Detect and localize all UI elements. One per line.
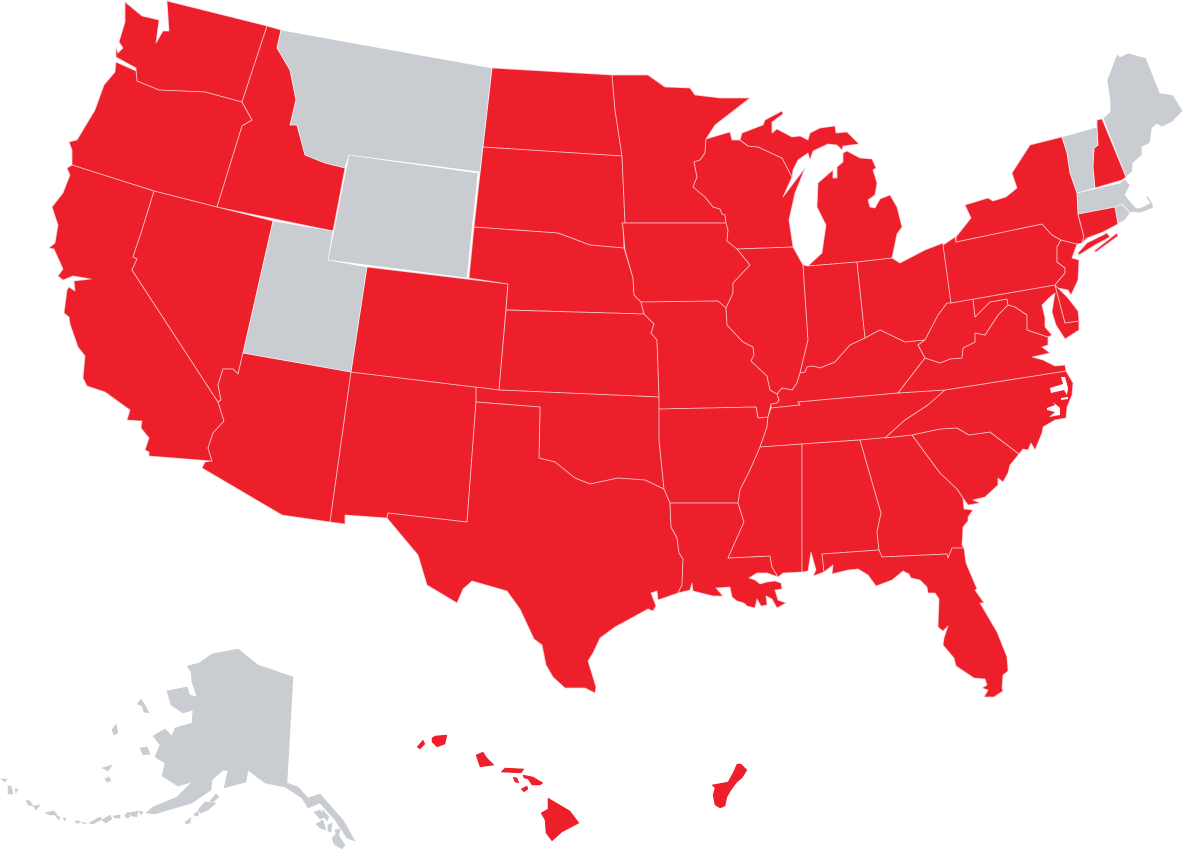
New Mexico [330, 372, 476, 524]
New Hampshire [1093, 119, 1126, 188]
Minnesota [612, 75, 750, 223]
Kentucky [771, 330, 925, 408]
Tennessee [760, 390, 945, 447]
Vermont [1062, 127, 1098, 193]
Colorado [351, 267, 508, 390]
Wyoming [328, 155, 478, 278]
Hawaii big island [541, 798, 579, 841]
Alabama [802, 440, 881, 576]
Niihau [417, 740, 425, 749]
Alaska [1, 649, 355, 849]
Mississippi [728, 444, 802, 577]
Oregon [69, 62, 252, 207]
Missouri [641, 301, 779, 418]
Lanai [513, 777, 519, 783]
Kansas [499, 310, 659, 397]
Nebraska [469, 227, 644, 314]
Kahoolawe [521, 786, 528, 792]
Massachusetts [1077, 179, 1153, 214]
Illinois [726, 247, 808, 394]
South Dakota [474, 147, 625, 248]
contiguous states shaded red [49, 1, 1126, 697]
Virginia [898, 305, 1066, 393]
Kauai [432, 735, 447, 747]
Pennsylvania [943, 224, 1065, 303]
Arkansas [659, 407, 768, 503]
Maryland [973, 285, 1079, 339]
Idaho [217, 26, 345, 231]
Washington [116, 1, 267, 102]
Indiana [800, 262, 865, 373]
Connecticut [1078, 207, 1118, 243]
Utah [243, 221, 367, 372]
New Jersey [1055, 240, 1079, 295]
South Carolina [912, 428, 1019, 505]
Pamlico and Albemarle sound inlets [1047, 377, 1068, 417]
California [49, 165, 224, 461]
Delaware [1055, 285, 1079, 323]
Alaska islands [137, 699, 149, 713]
Alaska mainland [146, 649, 355, 841]
Nevada [132, 191, 273, 402]
Wisconsin [693, 132, 805, 249]
Maine [1103, 53, 1183, 177]
Hawaii [417, 735, 579, 841]
Rhode Island [1115, 204, 1130, 224]
North Dakota [483, 68, 622, 156]
North Carolina [885, 371, 1073, 454]
West Virginia [918, 299, 1008, 363]
Oklahoma [476, 387, 664, 489]
Texas [387, 402, 683, 693]
Michigan [740, 111, 902, 266]
Oahu [476, 752, 494, 767]
Florida [822, 548, 1008, 697]
Maui [523, 775, 543, 785]
states shaded grey [243, 30, 1183, 372]
Guam [712, 764, 747, 808]
Molokai [501, 768, 524, 773]
New York [956, 137, 1118, 255]
Louisiana [670, 503, 786, 608]
Arizona [202, 353, 351, 522]
Iowa [622, 223, 750, 308]
Georgia [860, 435, 973, 558]
Ohio [857, 243, 951, 342]
Montana [277, 30, 492, 172]
